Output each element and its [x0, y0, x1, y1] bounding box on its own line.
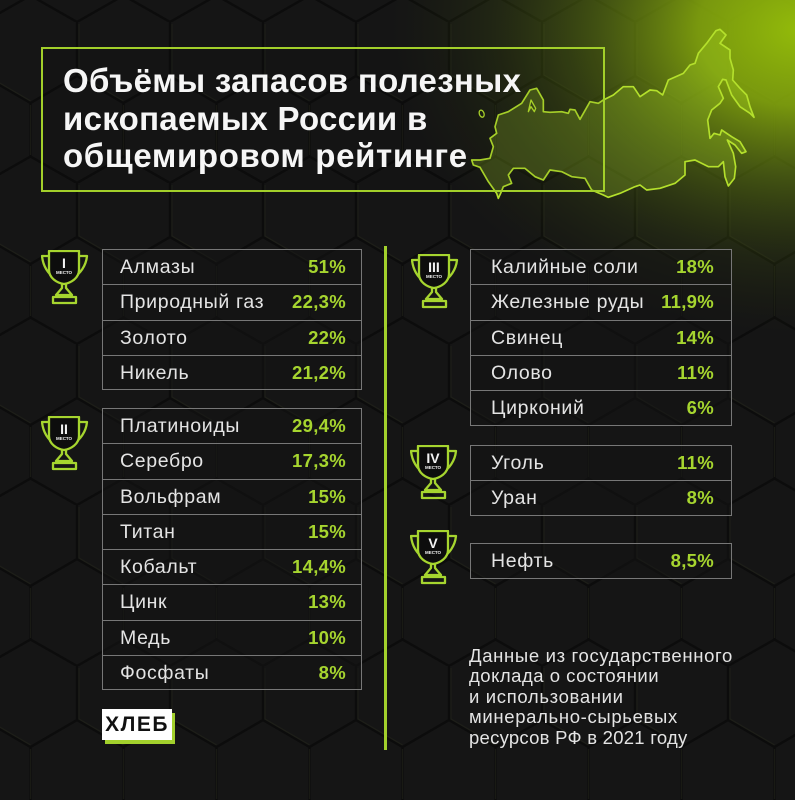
icon: trophy V: V — [428, 535, 438, 551]
divider — [384, 246, 387, 750]
row: Серебро: 17,3% — [292, 450, 346, 471]
row: Олово: Олово — [491, 362, 553, 384]
title: общемировом рейтинге — [63, 137, 468, 174]
source note — [469, 645, 733, 748]
row: Цинк — [103, 585, 361, 621]
row: Цирконий: 6% — [687, 397, 714, 418]
row: Фосфаты: Фосфаты — [120, 662, 209, 684]
source note: и использовании — [469, 686, 624, 707]
row: Никель: 21,2% — [292, 362, 346, 383]
icon: trophy III — [411, 254, 458, 308]
row: Кобальт: 14,4% — [292, 556, 346, 577]
source note: минерально-сырьевых — [469, 706, 678, 727]
source note: доклада о состоянии — [469, 665, 659, 686]
row: Железные руды: 11,9% — [661, 291, 714, 312]
row: Калийные соли — [471, 250, 731, 285]
row: Калийные соли: Калийные соли — [491, 256, 639, 278]
row: Уголь — [471, 446, 731, 481]
row: Свинец: 14% — [676, 327, 714, 348]
row: Серебро: Серебро — [120, 450, 204, 472]
row: Уголь: 11% — [677, 452, 714, 473]
row: Медь — [103, 621, 361, 656]
row: Медь: 10% — [308, 627, 346, 648]
row: Кобальт: Кобальт — [120, 556, 197, 578]
icon: trophy II: МЕСТО — [56, 436, 73, 441]
icon: trophy I — [41, 250, 88, 304]
table: second place — [102, 408, 362, 690]
row: Свинец — [471, 321, 731, 356]
row: Золото: Золото — [120, 327, 188, 349]
row: Природный газ: 22,3% — [292, 291, 346, 312]
table: third place — [470, 249, 732, 426]
row: Никель: Никель — [120, 362, 189, 384]
row: Титан: Титан — [120, 521, 176, 543]
row: Уран: 8% — [687, 487, 714, 508]
row: Природный газ — [103, 285, 361, 321]
title box — [41, 47, 605, 192]
row: Вольфрам — [103, 480, 361, 515]
row: Природный газ: Природный газ — [120, 291, 264, 313]
row: Кобальт — [103, 550, 361, 585]
row: Железные руды — [471, 285, 731, 321]
row: Цирконий — [491, 397, 714, 419]
row: Уран — [491, 487, 714, 509]
logo — [102, 709, 172, 740]
logo: ХЛЕБ — [105, 713, 169, 736]
row: Алмазы — [103, 250, 361, 285]
source note: Данные из государственного — [469, 645, 733, 666]
row: Фосфаты — [120, 662, 346, 684]
icon: trophy I: МЕСТО — [56, 270, 73, 275]
row: Нефть: Нефть — [491, 550, 554, 572]
row: Золото — [103, 321, 361, 356]
icon: trophy IV: МЕСТО — [425, 465, 442, 470]
row: Нефть: 8,5% — [671, 550, 714, 571]
table: fourth place — [470, 445, 732, 516]
title: Объёмы запасов полезных — [63, 62, 521, 99]
row: Калийные соли: 18% — [676, 256, 714, 277]
row: Алмазы: 51% — [308, 256, 346, 277]
row: Уголь: Уголь — [491, 452, 544, 474]
icon: trophy II: II — [60, 421, 68, 437]
row: Цирконий: Цирконий — [491, 397, 585, 419]
icon: trophy II — [41, 416, 88, 470]
table: first place — [102, 249, 362, 390]
icon: trophy III: III — [428, 259, 440, 275]
row: Фосфаты: 8% — [319, 662, 346, 683]
row: Платиноиды: Платиноиды — [120, 415, 240, 437]
row: Олово — [471, 356, 731, 391]
icon: trophy V: МЕСТО — [425, 550, 442, 555]
icon: trophy IV: IV — [426, 450, 440, 466]
row: Железные руды: Железные руды — [491, 291, 644, 313]
row: Золото: 22% — [308, 327, 346, 348]
row: Нефть — [491, 550, 714, 572]
icon: trophy V — [410, 530, 458, 584]
row: Свинец: Свинец — [491, 327, 563, 349]
icon: trophy III: МЕСТО — [426, 274, 443, 279]
row: Цинк: Цинк — [120, 591, 167, 613]
row: Медь: Медь — [120, 627, 171, 649]
icon: trophy IV — [410, 445, 458, 500]
map of Russia — [470, 28, 755, 200]
row: Платиноиды: 29,4% — [292, 415, 346, 436]
row: Платиноиды — [103, 409, 361, 444]
row: Титан — [103, 515, 361, 550]
table: fifth place — [470, 543, 732, 579]
row: Вольфрам: 15% — [308, 486, 346, 507]
row: Вольфрам: Вольфрам — [120, 486, 221, 508]
row: Серебро — [103, 444, 361, 480]
row: Титан: 15% — [308, 521, 346, 542]
row: Уран: Уран — [491, 487, 538, 509]
title: ископаемых России в — [63, 100, 428, 136]
row: Никель — [120, 362, 346, 384]
source note: ресурсов РФ в 2021 году — [469, 727, 688, 748]
title — [63, 62, 521, 174]
row: Цинк: 13% — [308, 591, 346, 612]
row: Олово: 11% — [677, 362, 714, 383]
icon: trophy I: I — [62, 255, 66, 271]
row: Алмазы: Алмазы — [120, 256, 195, 278]
